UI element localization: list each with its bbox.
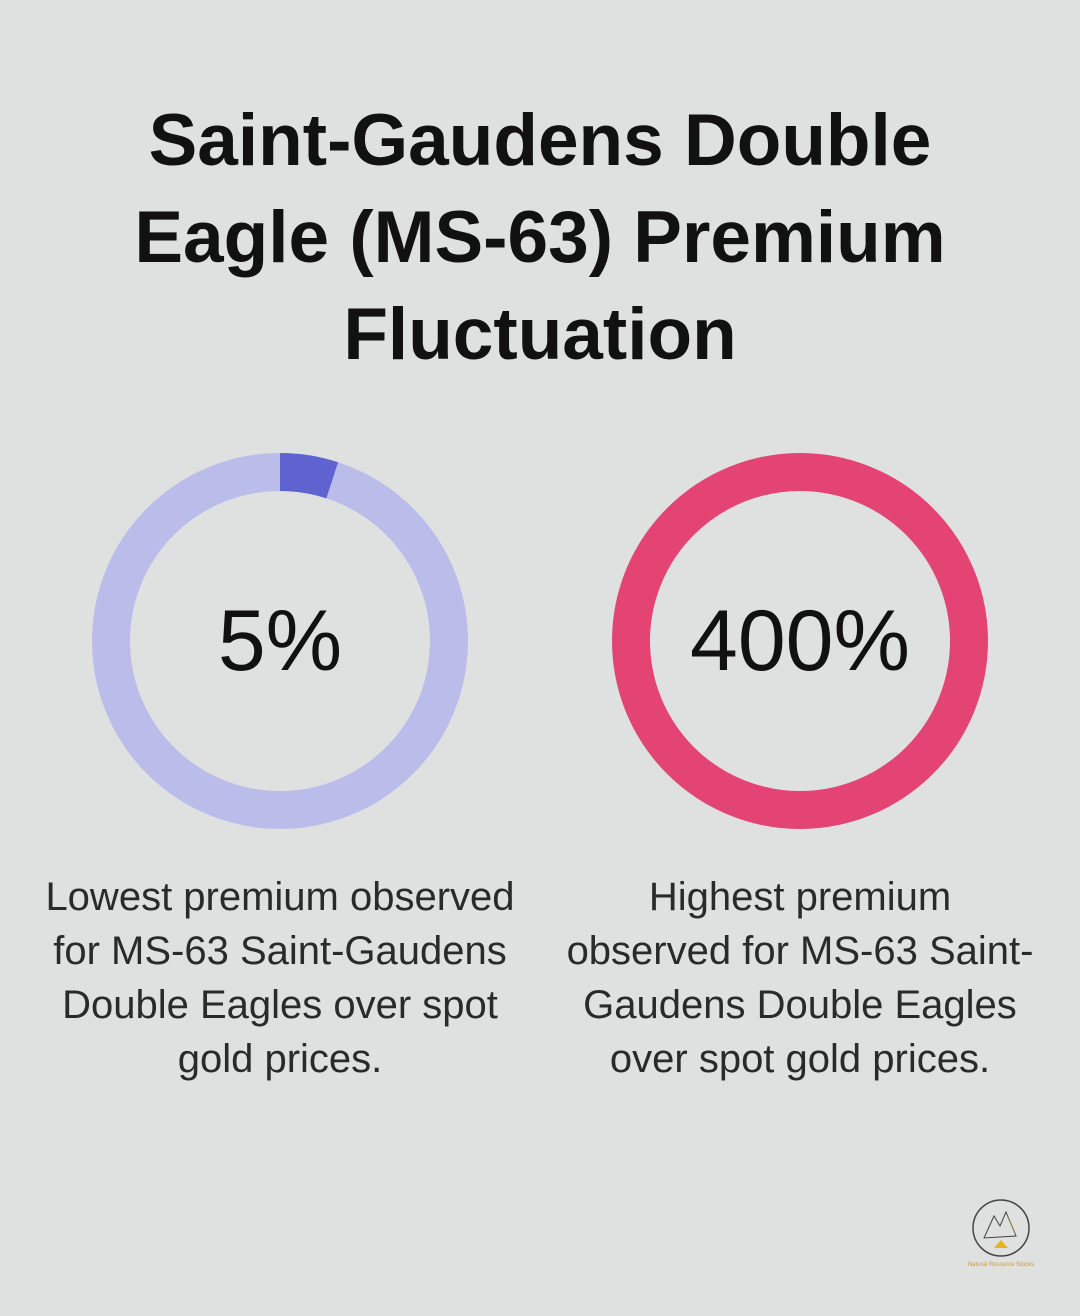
title: Fluctuation: [343, 294, 737, 375]
logo: Natural Resource Stocks: [968, 1262, 1034, 1268]
chart: 400% donut: 400%: [690, 593, 910, 689]
title: Eagle (MS-63) Premium: [134, 197, 946, 278]
chart: 5% donut: [92, 453, 468, 829]
text: lowest premium: Lowest premium observed: [45, 875, 515, 919]
text: lowest premium: gold prices.: [178, 1037, 382, 1081]
title: Saint-Gaudens Double: [149, 100, 931, 181]
chart: 5% donut: 5%: [218, 593, 342, 689]
text: highest premium: [567, 875, 1033, 1081]
text: highest premium: over spot gold prices.: [610, 1037, 990, 1081]
text: lowest premium: [45, 875, 515, 1081]
logo: [968, 1199, 1034, 1268]
chart: 400% donut: [612, 453, 988, 829]
text: lowest premium: Double Eagles over spot: [62, 983, 498, 1027]
text: highest premium: observed for MS-63 Saint-: [567, 929, 1033, 973]
text: lowest premium: for MS-63 Saint-Gaudens: [53, 929, 507, 973]
text: highest premium: Highest premium: [649, 875, 951, 919]
text: highest premium: Gaudens Double Eagles: [583, 983, 1017, 1027]
title: [134, 100, 946, 375]
